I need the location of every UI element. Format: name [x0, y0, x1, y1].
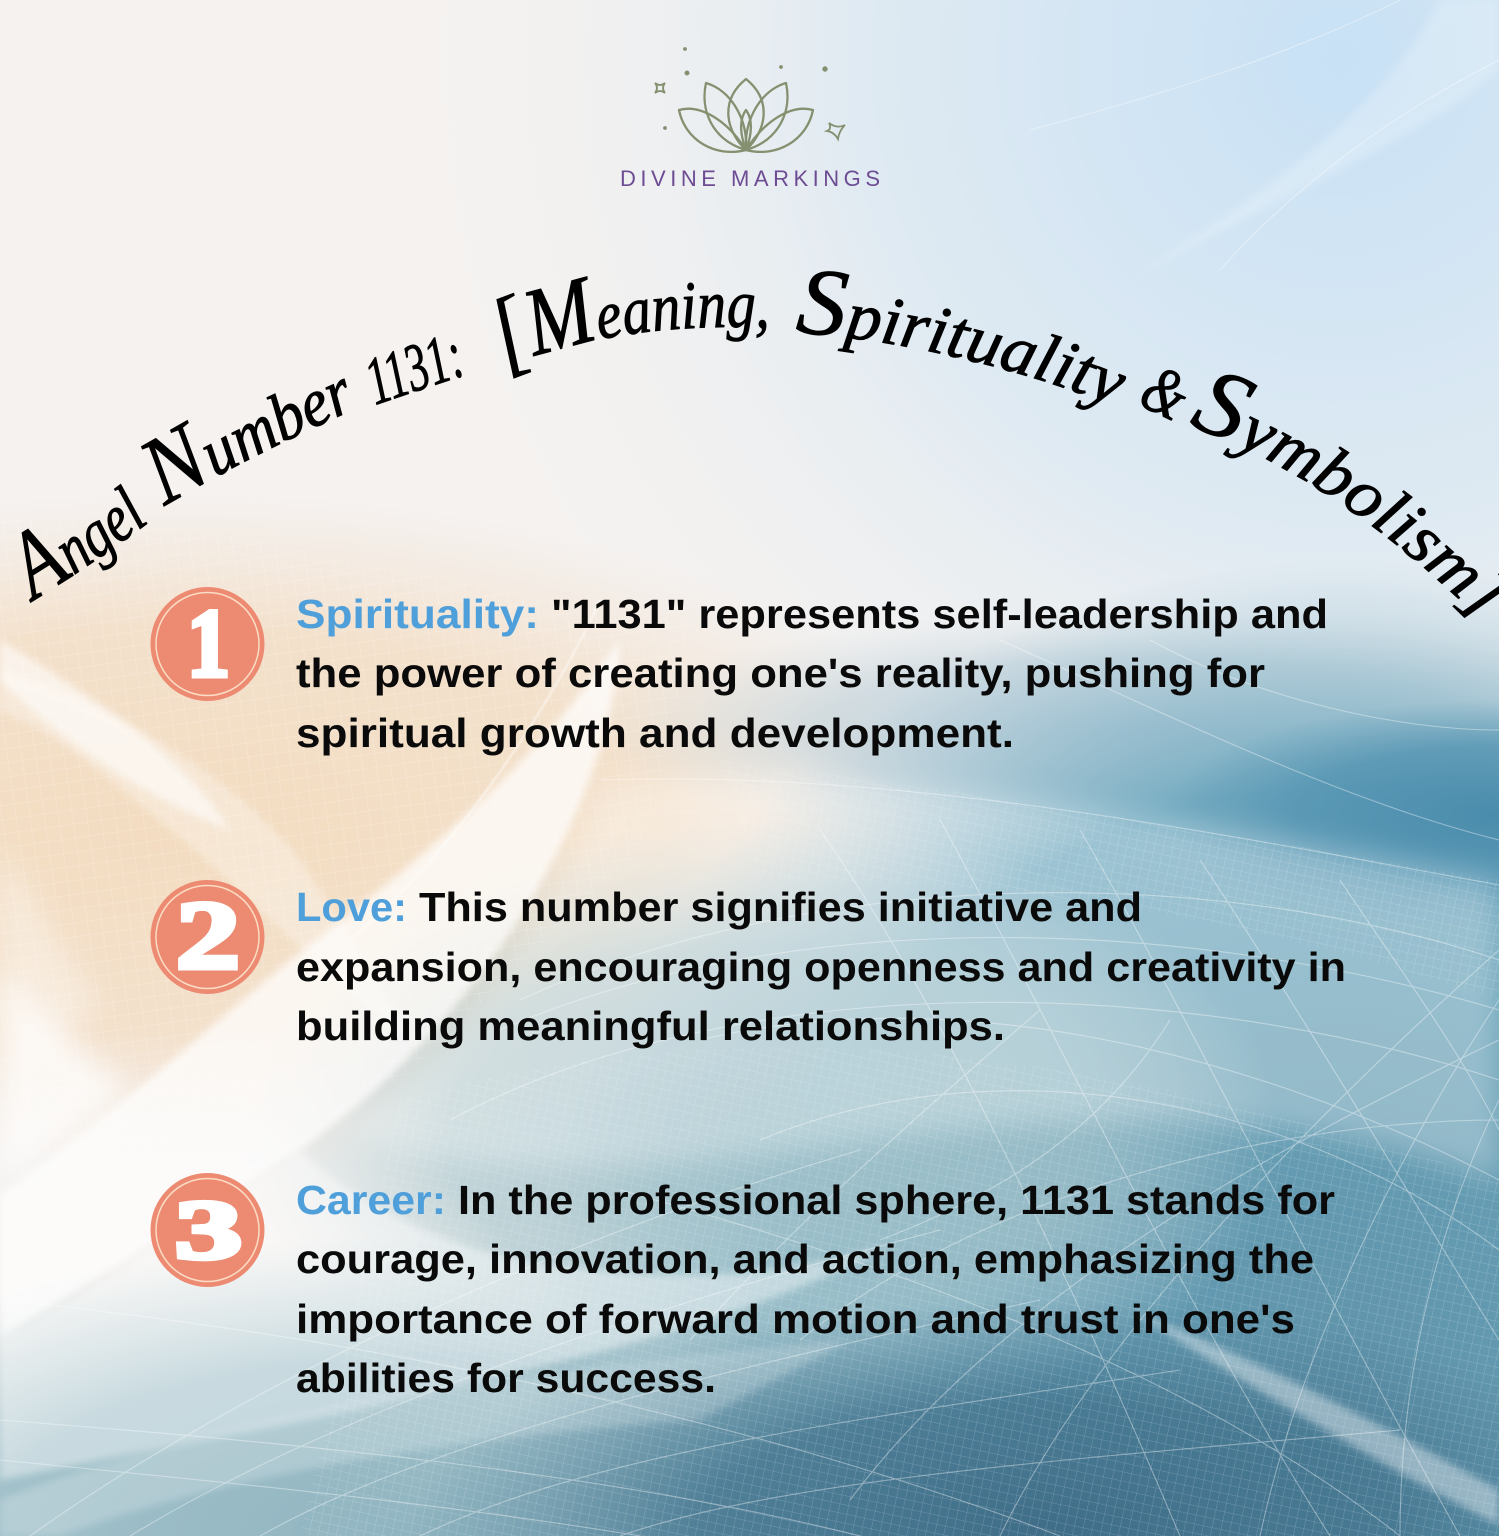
- title: curved script heading: 1131:: [368, 337, 462, 406]
- title: curved script heading: Spirituality: [796, 271, 1126, 410]
- text block: Spirituality: "1131" represents self-leadership and: [551, 591, 1328, 637]
- text block: Career: abilities for success.: [296, 1355, 716, 1401]
- text block: Career: [296, 1177, 1335, 1401]
- item 2: Love: [150, 880, 1346, 1049]
- text block: Career: courage, innovation, and action, emphasizing the: [296, 1236, 1314, 1282]
- title: curved script heading: [Meaning,: [496, 276, 766, 379]
- text block: Career: In the professional sphere, 1131 stands for: [458, 1177, 1335, 1223]
- text block: Career: Career:: [296, 1177, 446, 1223]
- number badge 3: [150, 1173, 264, 1287]
- title: curved script heading: [22, 271, 1499, 618]
- number badge 2: [150, 880, 264, 994]
- icon: sparkles: [655, 48, 845, 139]
- text block: Spirituality: Spirituality:: [296, 591, 539, 637]
- number badge 1: 1: [187, 590, 230, 698]
- title: curved script heading: &: [1142, 370, 1186, 421]
- logo: Divine Markings: [620, 48, 880, 191]
- text block: Spirituality: spiritual growth and development.: [296, 710, 1014, 756]
- text block: Love: This number signifies initiative and: [419, 884, 1142, 930]
- item 3: Career: [150, 1173, 1335, 1401]
- text block: Love: expansion, encouraging openness and creativity in: [296, 944, 1346, 990]
- text block: Love: [296, 884, 1346, 1049]
- text block: Spirituality: the power of creating one's reality, pushing for: [296, 650, 1265, 696]
- text block: Love: Love:: [296, 884, 407, 930]
- text block: Spirituality: [296, 591, 1328, 756]
- number badge 3: 3: [175, 1184, 242, 1277]
- number badge 2: 2: [176, 882, 240, 990]
- text block: Love: building meaningful relationships.: [296, 1003, 1005, 1049]
- title: curved script heading: Number: [141, 378, 347, 507]
- logo wordmark: DIVINE MARKINGS: [620, 166, 880, 191]
- number badge 1: [150, 587, 264, 701]
- icon: lotus flower: [679, 79, 813, 152]
- text block: Career: importance of forward motion and trust in one's: [296, 1296, 1295, 1342]
- item 1: Spirituality: [150, 587, 1328, 756]
